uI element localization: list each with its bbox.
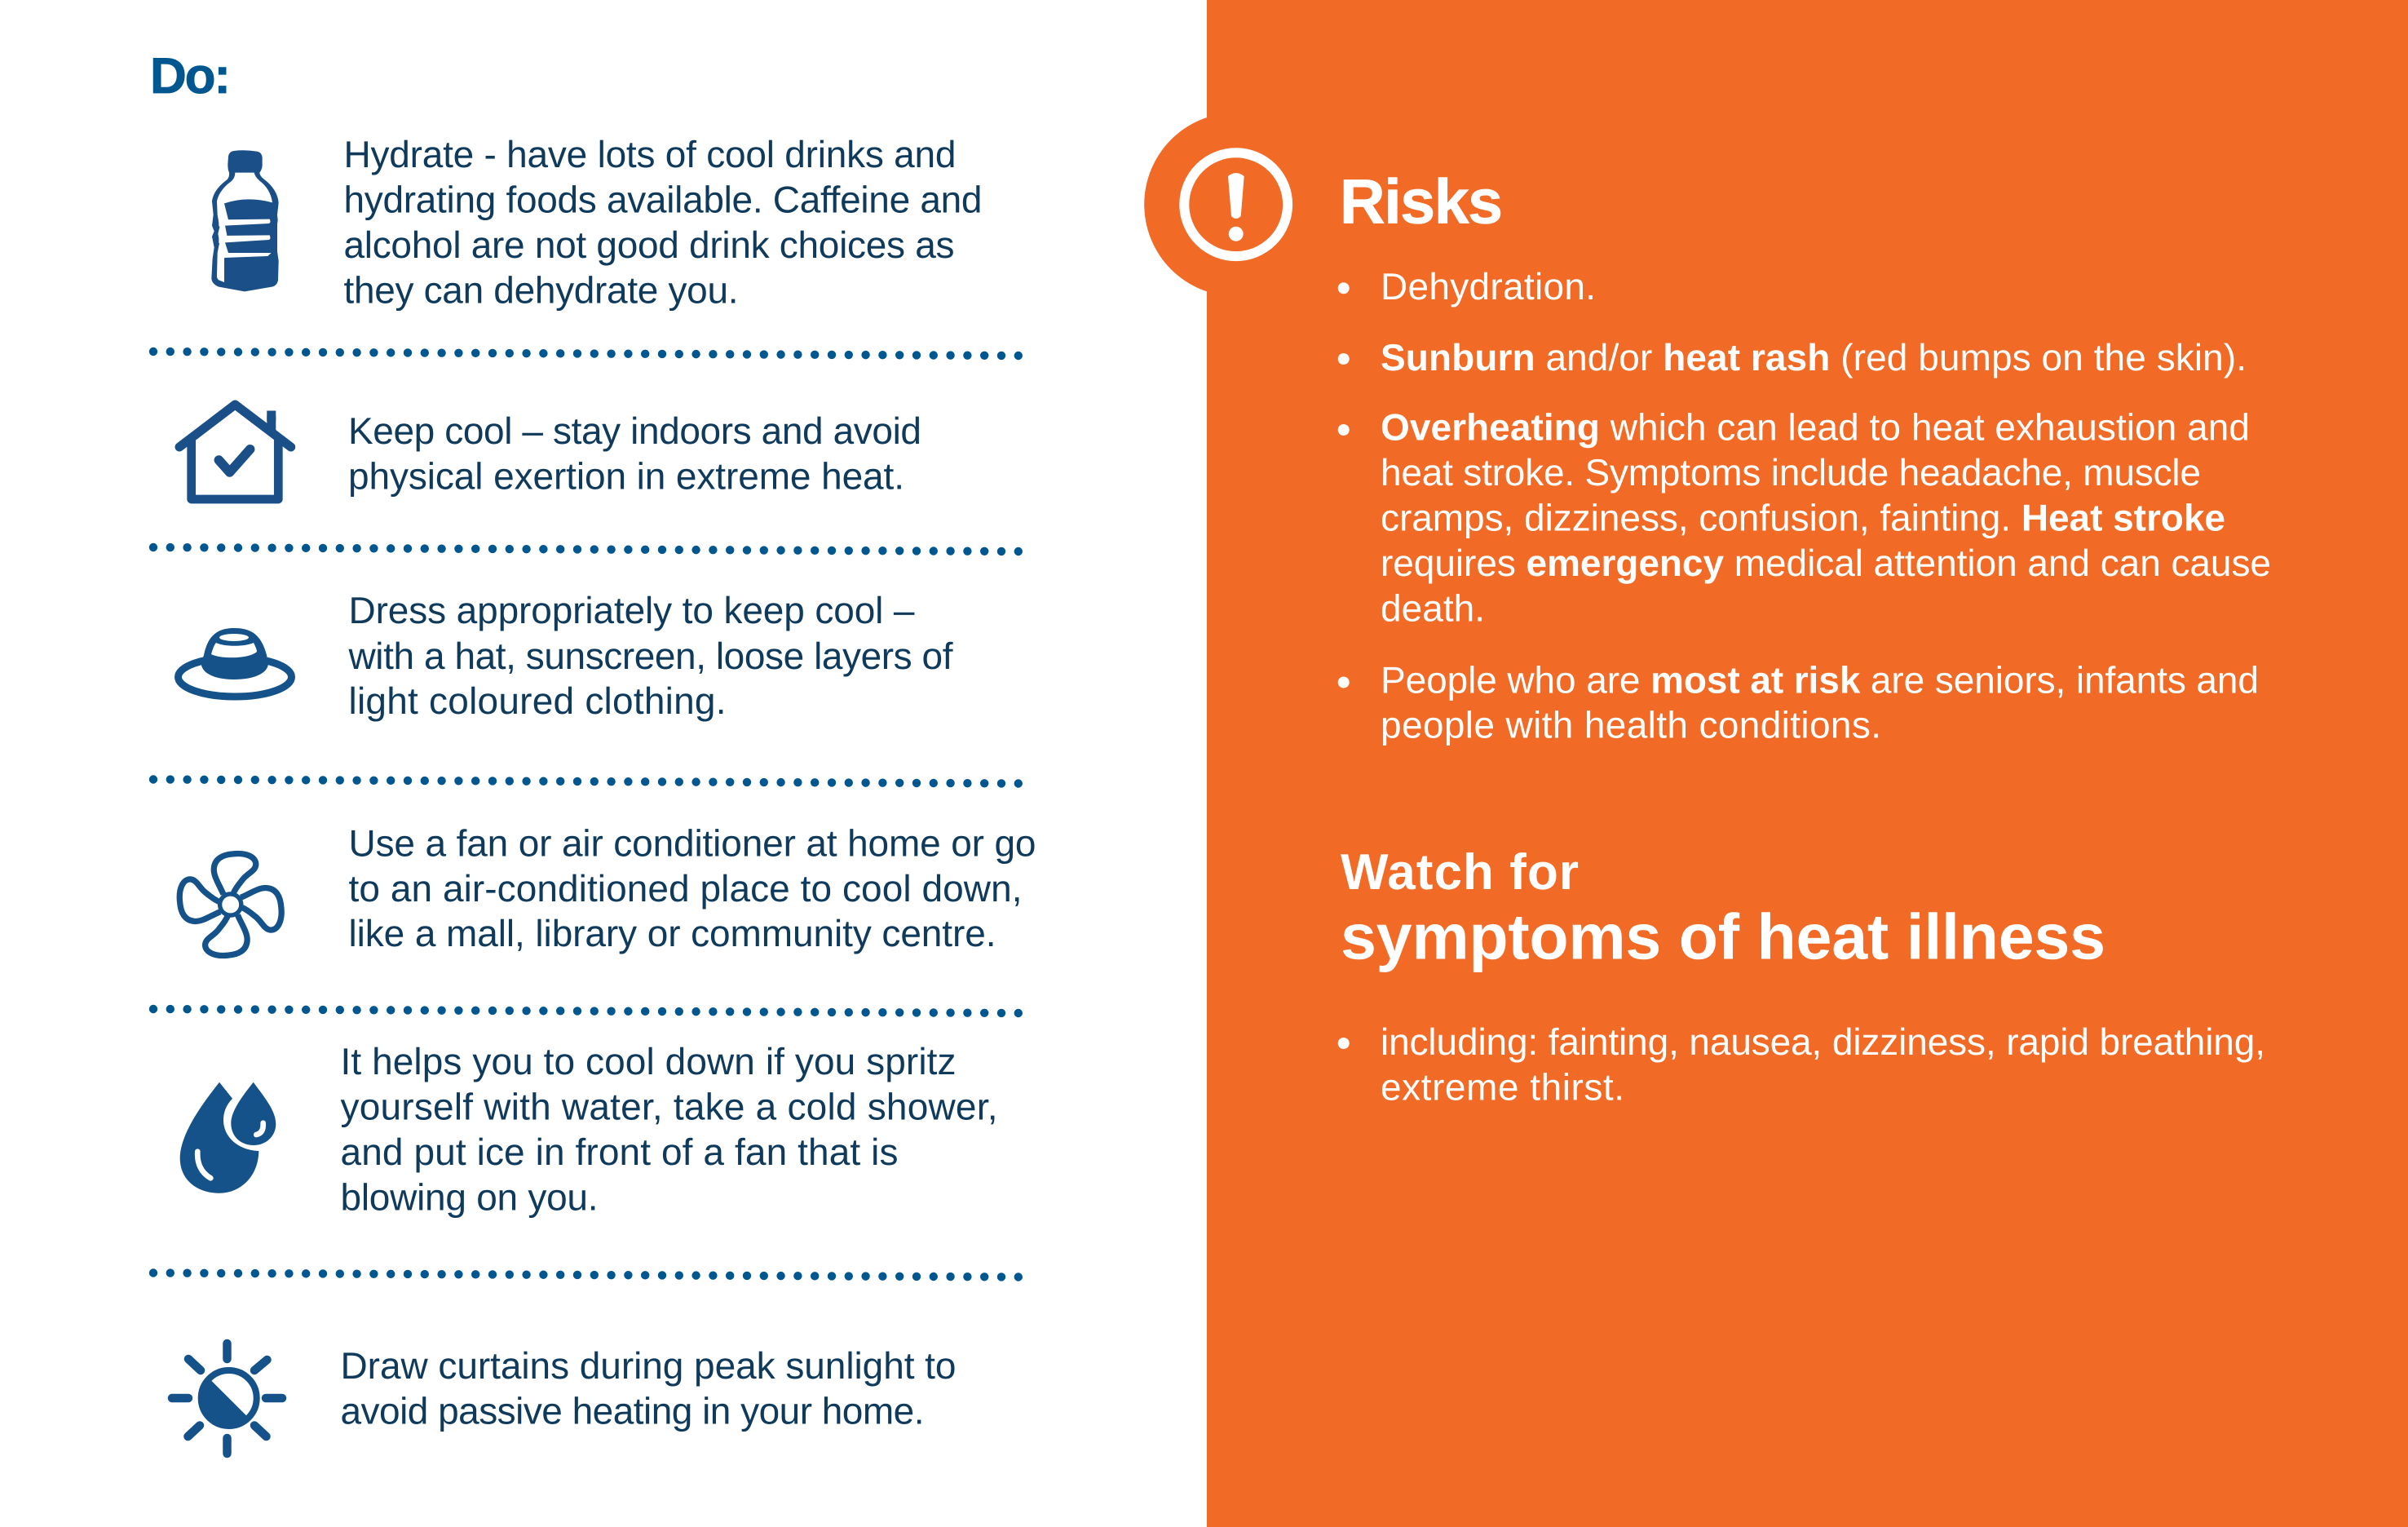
icon: exclamation [1184,153,1288,256]
icon: sun [172,1343,282,1454]
text: curtains: avoid passive heating in your home. [341,1390,925,1432]
text: hydrate: Hydrate - have lots of cool drinks and [344,133,956,175]
list: risks: cramps, dizziness, confusion, fainting. Heat stroke [1381,496,2225,538]
heading: watch for [1341,844,2105,972]
heading: Do: Do: [150,48,231,104]
list: symptoms: including: fainting, nausea, dizziness, rapid breathing, [1381,1020,2265,1063]
list: risks: Dehydration. [1381,265,1596,308]
text: spritz: It helps you to cool down if you spritz [341,1040,956,1082]
icon: fan [179,854,281,955]
text: curtains [341,1344,956,1432]
list: risks: death. [1381,587,1485,630]
icon: sun hat [178,628,292,697]
text: hydrate: alcohol are not good drink choices as [344,224,954,266]
text: hydrate: they can dehydrate you. [344,269,739,312]
divider dots 4 [153,1009,1019,1013]
text: keep cool [348,409,921,498]
list: symptoms: extreme thirst. [1381,1065,1624,1108]
list: risks: requires emergency medical attention and can cause [1381,542,2271,584]
list: risks [1338,265,2271,746]
icon: house with check [179,405,291,499]
text: curtains: Draw curtains during peak sunlight to [341,1344,956,1387]
list: risks: Overheating which can lead to heat exhaustion and [1381,406,2250,449]
list: risks: Sunburn and/or heat rash (red bumps on the skin). [1381,336,2247,378]
list: risks: people with health conditions. [1381,703,1881,746]
panel: risks [1144,0,2408,1527]
text: hydrate [344,133,982,312]
icon: water drops [180,1082,276,1193]
icon: water bottle [211,150,279,291]
text: dress: light coloured clothing. [349,679,726,722]
text: dress [347,589,953,722]
text: spritz: blowing on you. [341,1176,599,1219]
list: risks: People who are most at risk are seniors, infants and [1381,659,2259,702]
text: keep cool: physical exertion in extreme heat. [348,455,904,498]
text: fan or air conditioner [349,821,1036,954]
text: dress: with a hat, sunscreen, loose layers of [347,635,953,677]
text: fan or air conditioner: to an air-conditioned place to cool down, [349,867,1023,910]
divider dots 3 [153,780,1019,783]
divider dots 1 [153,352,1019,356]
list: symptoms [1338,1020,2265,1108]
divider dots 5 [153,1272,1019,1277]
text: spritz [341,1040,998,1219]
heading: watch for: Watch for [1341,844,1579,901]
text: spritz: yourself with water, take a cold shower, [341,1085,998,1127]
panel: do list [150,48,1036,1454]
text: fan or air conditioner: Use a fan or air conditioner at home or go [349,821,1036,864]
divider dots 2 [153,547,1019,551]
heading: Risks: Risks [1340,166,1503,237]
text: keep cool: Keep cool – stay indoors and avoid [348,409,921,452]
text: spritz: and put ice in front of a fan that is [341,1131,899,1173]
text: fan or air conditioner: like a mall, library or community centre. [349,912,996,954]
heading: watch for: symptoms of heat illness [1341,901,2105,972]
list: risks: heat stroke. Symptoms include headache, muscle [1381,451,2201,494]
text: hydrate: hydrating foods available. Caffeine and [344,178,982,220]
text: dress: Dress appropriately to keep cool – [349,589,915,631]
